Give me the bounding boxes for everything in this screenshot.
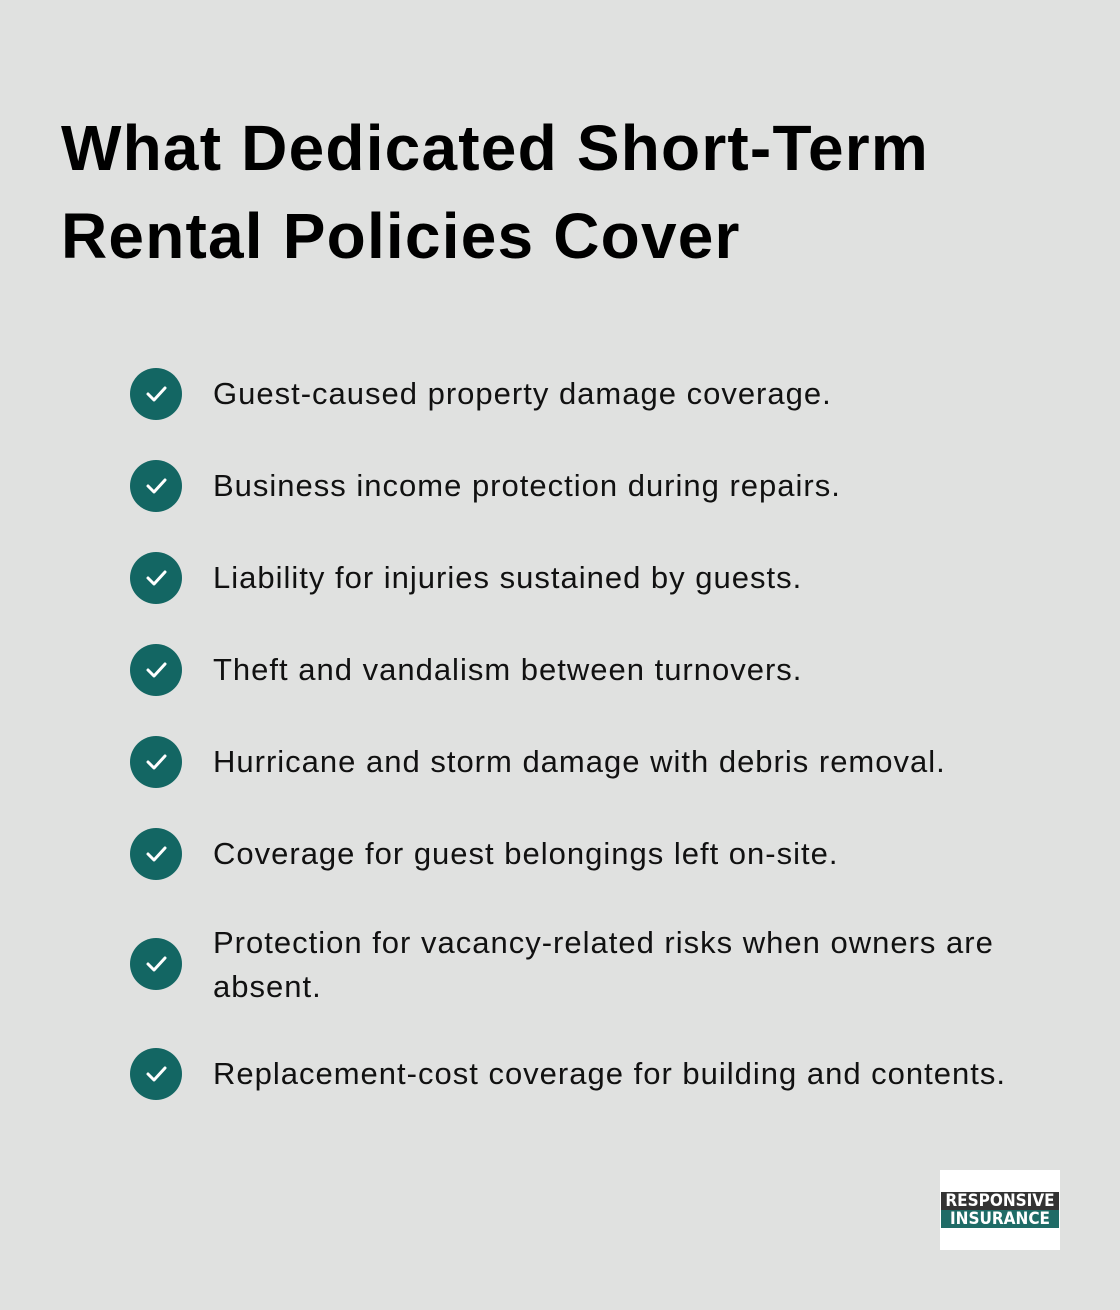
item: business income: Business income protection during repairs. <box>213 468 841 503</box>
logo: RESPONSIVE <box>945 1191 1055 1211</box>
item: replacement cost <box>130 1048 1006 1100</box>
item: vacancy: Protection for vacancy-related risks when owners are absent. <box>213 925 994 1004</box>
item: hurricane: Hurricane and storm damage with debris removal. <box>213 744 946 779</box>
item: guest belongings: Coverage for guest belongings left on-site. <box>213 836 838 871</box>
item: guest belongings <box>130 828 838 880</box>
item: hurricane <box>130 736 946 788</box>
title <box>61 112 929 272</box>
title: Rental Policies Cover <box>61 200 741 272</box>
title: What Dedicated Short-Term <box>61 112 929 184</box>
item: guest damage <box>130 368 832 420</box>
logo <box>940 1170 1060 1250</box>
item: guest damage: Guest-caused property damage coverage. <box>213 376 832 411</box>
item: business income <box>130 460 841 512</box>
item: theft: Theft and vandalism between turnovers. <box>213 652 802 687</box>
item: theft <box>130 644 802 696</box>
logo: INSURANCE <box>950 1209 1050 1229</box>
item: liability <box>130 552 802 604</box>
item: liability: Liability for injuries sustained by guests. <box>213 560 802 595</box>
item: replacement cost: Replacement-cost coverage for building and contents. <box>213 1056 1006 1091</box>
